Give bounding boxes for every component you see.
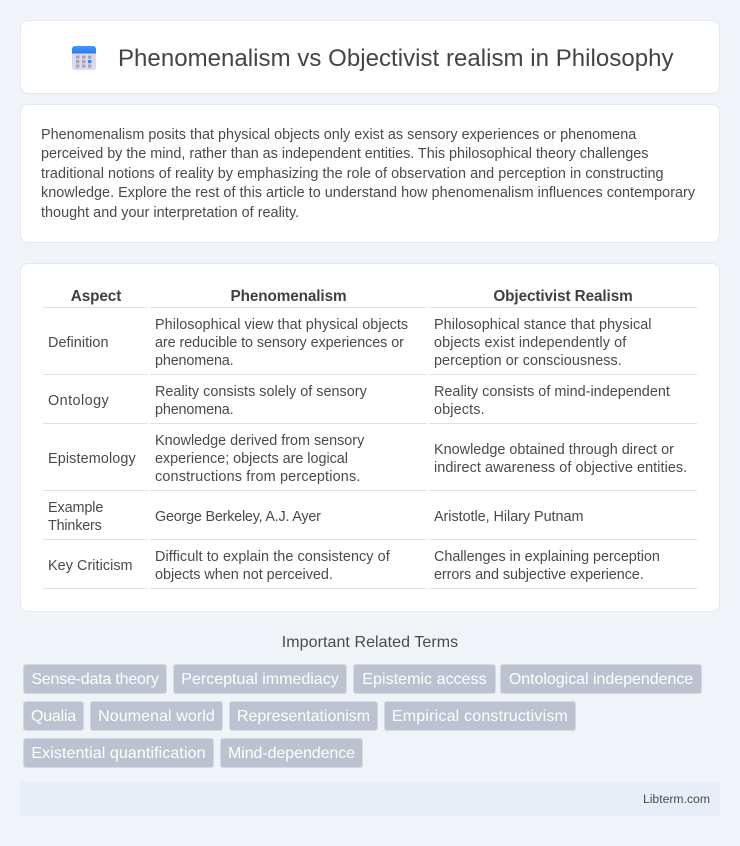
row: key criticism: Difficult to explain the consistency of bbox=[155, 549, 390, 565]
tag list: Existential quantification bbox=[31, 745, 206, 762]
footer credit: Libterm.com bbox=[643, 792, 710, 806]
row: example thinkers: George Berkeley, A.J. Ayer bbox=[155, 509, 321, 525]
row: key criticism: objects when not perceived. bbox=[155, 567, 333, 583]
footer bar bbox=[20, 782, 720, 816]
row: epistemology: constructions from perceptions. bbox=[155, 469, 361, 485]
row: example thinkers bbox=[48, 500, 583, 534]
row: key criticism: Key Criticism bbox=[48, 558, 133, 574]
row: epistemology: indirect awareness of objective entities. bbox=[434, 460, 687, 476]
comparison table panel bbox=[20, 263, 720, 612]
intro paragraph: traditional notions of reality by emphasizing the role of observation and perception in constructing bbox=[41, 166, 664, 182]
tag list: Sense-data theory bbox=[31, 671, 159, 688]
intro paragraph: knowledge. Explore the rest of this article to understand how phenomenalism influences contemporary bbox=[41, 185, 695, 201]
intro paragraph: thought and your interpretation of reality. bbox=[41, 205, 299, 221]
tag list: Mind-dependence bbox=[228, 745, 355, 762]
tag list: Epistemic access bbox=[362, 671, 487, 688]
table header: objectivist realism: Objectivist Realism bbox=[493, 288, 633, 305]
title: Phenomenalism vs Objectivist realism in Philosophy bbox=[118, 45, 674, 72]
table header: phenomenalism: Phenomenalism bbox=[230, 288, 346, 305]
row: ontology bbox=[48, 384, 670, 418]
tag list: Representationism bbox=[237, 708, 370, 725]
row: epistemology: Epistemology bbox=[48, 451, 136, 467]
row: definition: Philosophical view that physical objects bbox=[155, 317, 408, 333]
row: epistemology: Knowledge obtained through direct or bbox=[434, 442, 674, 458]
row: definition bbox=[48, 317, 652, 369]
row: ontology: Ontology bbox=[48, 393, 109, 409]
tag list: Qualia bbox=[31, 708, 76, 725]
intro paragraph: perceived by the mind, rather than as independent entities. This philosophical theory challenges bbox=[41, 146, 648, 162]
row: definition: are reducible to sensory experiences or bbox=[155, 335, 404, 351]
row: epistemology: experience; objects are logical bbox=[155, 451, 348, 467]
row: definition: Definition bbox=[48, 335, 108, 351]
tag list bbox=[23, 664, 702, 768]
tag list: Noumenal world bbox=[98, 708, 215, 725]
row: definition: phenomena. bbox=[155, 353, 234, 369]
row: definition: perception or consciousness. bbox=[434, 353, 622, 369]
row: key criticism bbox=[48, 549, 660, 583]
tag list: Ontological independence bbox=[509, 671, 693, 688]
row: ontology: Reality consists of mind-independent bbox=[434, 384, 670, 400]
row: key criticism: Challenges in explaining perception bbox=[434, 549, 660, 565]
header panel bbox=[20, 20, 720, 94]
tag list: Perceptual immediacy bbox=[181, 671, 339, 688]
icon: calendar bbox=[72, 46, 96, 70]
tag list: Empirical constructivism bbox=[392, 708, 568, 725]
row: ontology: phenomena. bbox=[155, 402, 234, 418]
row: definition: objects exist independently of bbox=[434, 335, 626, 351]
row: definition: Philosophical stance that physical bbox=[434, 317, 652, 333]
row: example thinkers: Example bbox=[48, 500, 103, 516]
intro paragraph bbox=[41, 127, 695, 221]
row: ontology: objects. bbox=[434, 402, 485, 418]
row: key criticism: errors and subjective experience. bbox=[434, 567, 644, 583]
row: epistemology bbox=[48, 433, 687, 485]
row: ontology: Reality consists solely of sensory bbox=[155, 384, 367, 400]
heading: related terms: Important Related Terms bbox=[282, 634, 458, 651]
table header: aspect: Aspect bbox=[71, 288, 121, 305]
intro text panel bbox=[20, 104, 720, 243]
row: example thinkers: Thinkers bbox=[48, 518, 102, 534]
row: epistemology: Knowledge derived from sensory bbox=[155, 433, 364, 449]
row: example thinkers: Aristotle, Hilary Putnam bbox=[434, 509, 583, 525]
intro paragraph: Phenomenalism posits that physical objects only exist as sensory experiences or phenomena bbox=[41, 127, 636, 143]
